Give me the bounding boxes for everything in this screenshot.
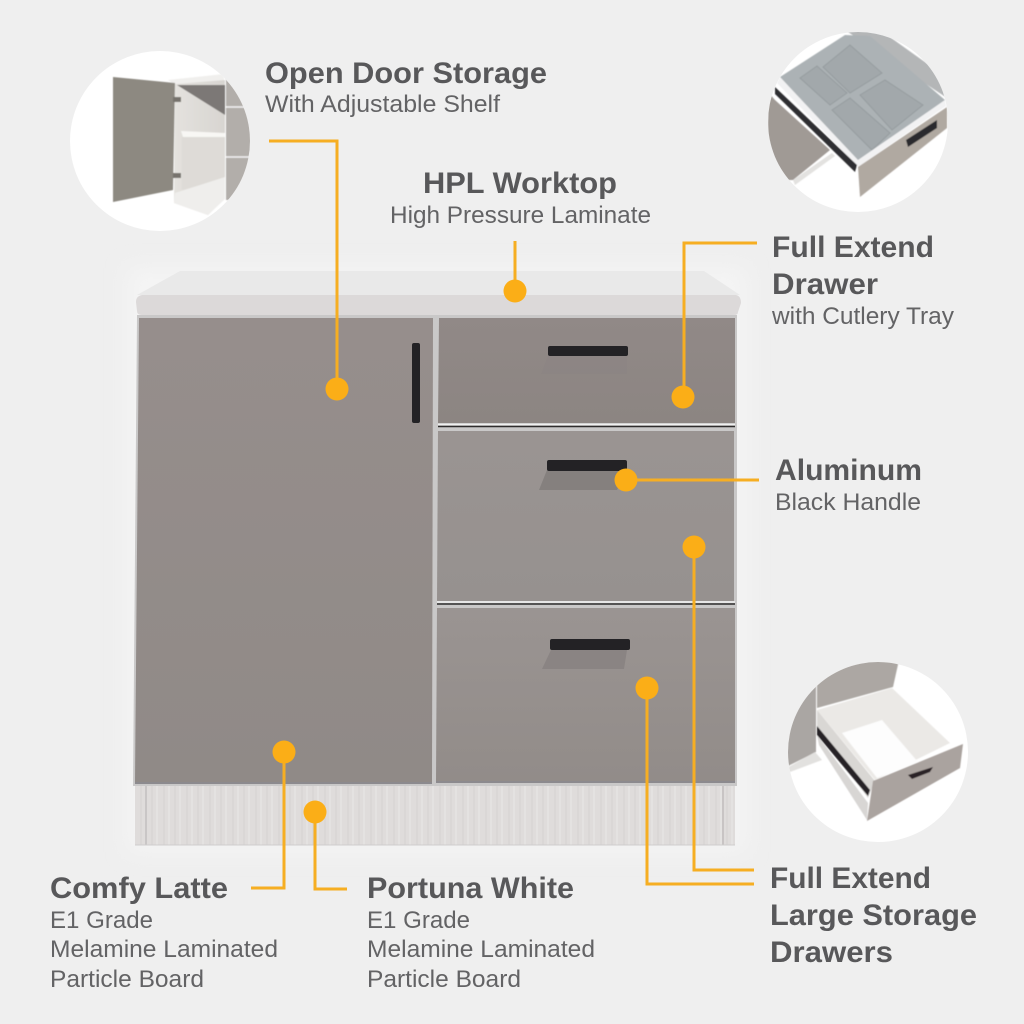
door panel [135,318,433,782]
dot: large drawer upper [682,536,706,558]
interior shadow [177,85,225,115]
black runner [775,87,857,172]
drawer handle [906,120,937,147]
drawer lower side [817,735,868,820]
drawer 3 [436,608,735,781]
inset: cutlery tray drawer [768,30,950,212]
label: comfy latte: Melamine Laminated [50,936,278,963]
inset: large storage drawer [780,660,968,842]
top cap [169,74,224,84]
drawer floor [842,720,918,778]
label: open door storage: Open Door Storage [265,57,547,90]
rear wall [848,32,944,97]
label: HPL worktop: High Pressure Laminate [390,202,651,229]
connector: comfy latte [251,752,284,888]
drawer 3 handle [550,639,630,650]
label: aluminum: Aluminum [775,454,922,487]
hinges [173,97,181,102]
callout lines and dots [251,141,759,889]
drawer 2 handle [547,460,627,471]
drawer 1 [438,318,735,423]
drawer handle [908,767,933,779]
drawer 1 handle shadow [541,356,627,374]
connector: large drawer lower [647,688,754,884]
dot: worktop [504,280,526,302]
label: portuna white: Particle Board [367,966,521,993]
plinth [135,784,735,845]
label: aluminum: Black Handle [775,489,921,516]
door handle [412,343,420,423]
connector: handle [626,478,759,482]
label: HPL worktop [390,167,651,229]
dot: portuna white [304,800,326,824]
drawer 3 handle shadow [542,650,627,669]
label: portuna white: Melamine Laminated [367,936,595,963]
tray [780,35,945,162]
carcass interior [174,80,225,215]
label: aluminum [775,454,922,516]
label: comfy latte: Particle Board [50,966,204,993]
dot: door [326,378,348,400]
label: full extend drawer: with Cutlery Tray [771,303,954,330]
background cabinet [768,92,830,180]
lower floor [174,177,225,215]
worktop [136,271,741,315]
label: full extend large storage drawers [770,862,977,969]
label: comfy latte [50,872,278,993]
dot: cutlery drawer [672,386,694,408]
label: HPL worktop: HPL Worktop [423,167,617,200]
dot: comfy latte [272,740,296,764]
inset: open door storage [70,51,252,231]
shelf [181,131,225,137]
label: full extend drawer: Drawer [772,268,878,301]
drawer 1 handle [548,346,628,356]
drawer interior [817,688,950,780]
connector: worktop [514,241,516,291]
label: portuna white [367,872,595,993]
white drawer edge [777,77,946,167]
connector: cutlery drawer [684,243,757,397]
drawer front [858,107,947,197]
drawer front [867,744,963,821]
cabinet base strip [790,752,822,772]
label: full extend drawer: Full Extend [772,231,934,264]
label: full extend large storage drawers: Drawers [770,936,893,969]
tray compartments [800,66,847,105]
label: portuna white: Portuna White [367,872,574,905]
label: comfy latte: E1 Grade [50,907,153,934]
drawer 2 [437,431,734,601]
label: comfy latte: Comfy Latte [50,872,228,905]
cabinet illustration [133,271,741,845]
label: full extend large storage drawers: Full Extend [770,862,931,895]
dot: large drawer lower [636,676,658,700]
connector: large drawer upper [694,547,754,870]
label: portuna white: E1 Grade [367,907,470,934]
drawer 2 handle shadow [539,470,627,490]
door bottom edge [135,782,735,783]
drawer inner side [817,710,875,798]
connector: portuna white [315,812,347,889]
background cabinet [788,686,816,766]
label: open door storage [265,57,547,118]
label: open door storage: With Adjustable Shelf [265,91,500,118]
open door [113,77,175,202]
drawer gaps [437,426,735,604]
dot: handle [614,468,638,492]
label: full extend drawer [771,231,954,330]
cabinet base strip [793,153,835,185]
connector: open door [269,141,337,389]
label: full extend large storage drawers: Large Storage [770,899,977,932]
black runner [817,726,870,796]
lower interior [182,137,225,190]
drawer fronts [226,78,252,200]
carcass frame [133,315,737,786]
